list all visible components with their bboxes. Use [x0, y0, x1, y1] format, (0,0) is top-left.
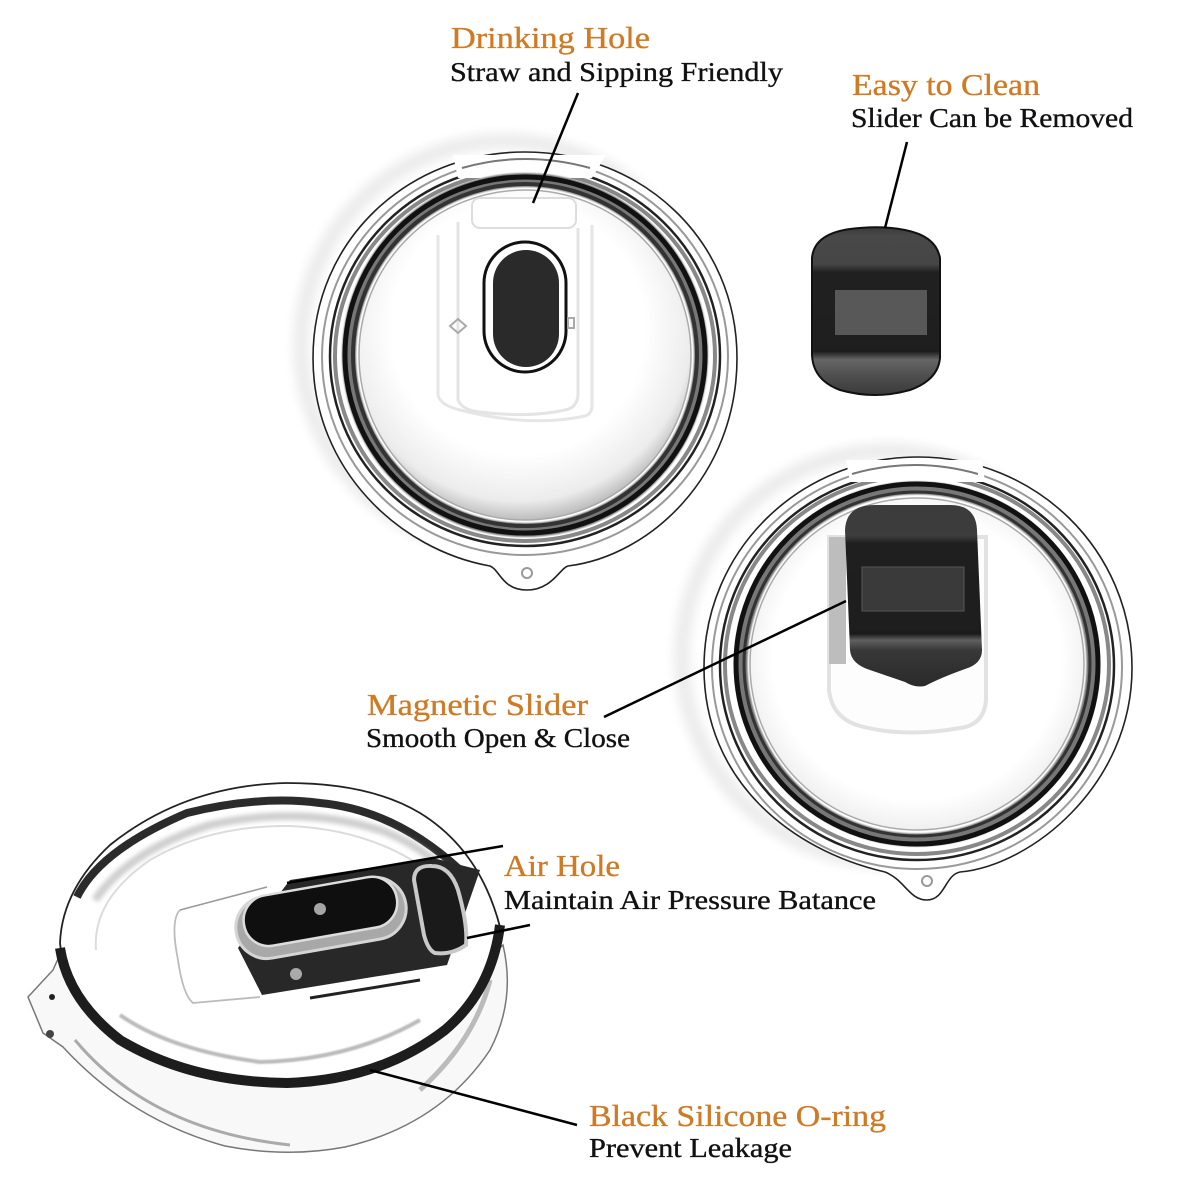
upper inner dark arc [77, 801, 460, 897]
callout: air hole: Maintain Air Pressure Batance [504, 885, 876, 915]
icon: magnetic slider [845, 505, 982, 686]
icon: drinking hole oval [484, 242, 566, 372]
callout: black silicone o-ring: Prevent Leakage [589, 1133, 792, 1163]
callout: easy to clean: Easy to Clean [852, 67, 1041, 102]
callout: black silicone o-ring: Black Silicone O-ring [589, 1098, 886, 1133]
body of lid with rim [60, 783, 500, 1085]
air hole and drinking hole block [231, 858, 480, 998]
callout: magnetic slider: Smooth Open & Close [366, 723, 630, 753]
callout: magnetic slider [366, 601, 846, 753]
callout: magnetic slider: Magnetic Slider [367, 687, 589, 722]
callout: air hole: Air Hole [504, 848, 620, 883]
black silicone o-ring [60, 925, 500, 1083]
callout: drinking hole [450, 20, 784, 203]
lid: angled underside view with o-ring [28, 783, 507, 1152]
callout: easy to clean [851, 67, 1134, 228]
slider: removed piece [812, 227, 940, 395]
callout: drinking hole: Straw and Sipping Friendly [450, 57, 784, 87]
callout: black silicone o-ring [370, 1070, 886, 1163]
lid: top view with magnetic slider [682, 451, 1132, 900]
lid: top view with drinking hole [301, 141, 737, 590]
callout: easy to clean: Slider Can be Removed [851, 103, 1134, 133]
callout: air hole [287, 846, 876, 938]
callout: drinking hole: Drinking Hole [451, 20, 650, 55]
